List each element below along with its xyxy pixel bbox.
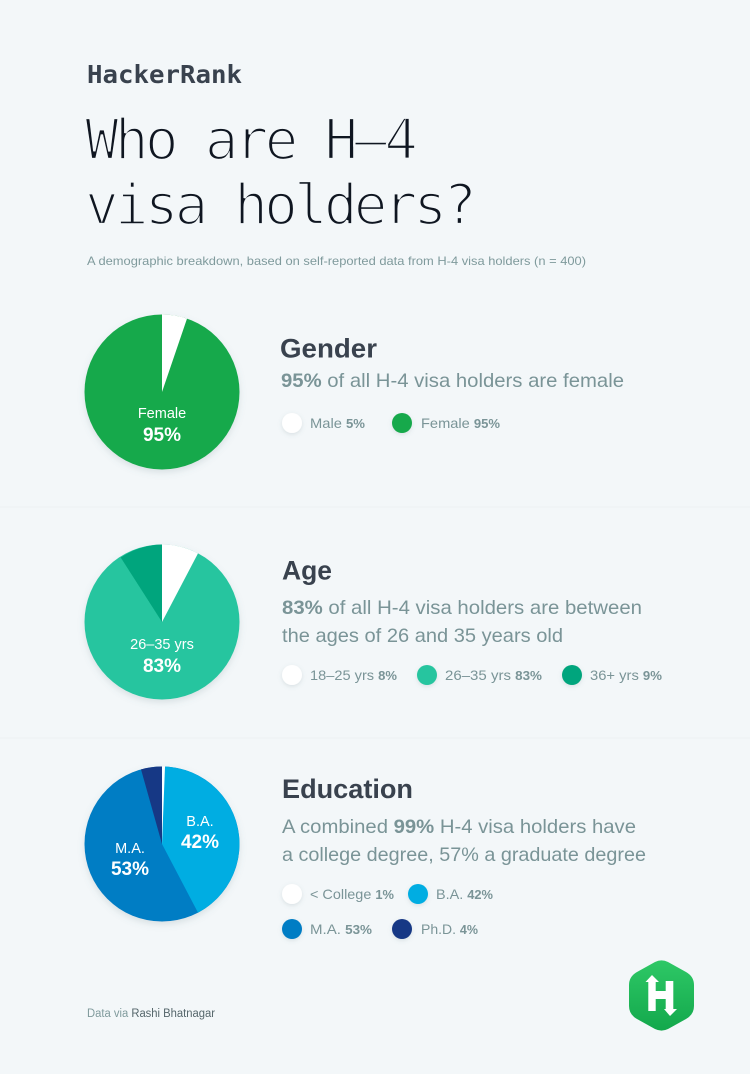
legend: gender: Female 95% [421,415,500,431]
legend: education [282,884,493,939]
pie chart: age: 26–35 yrs [130,637,194,653]
source credit: Data via Rashi Bhatnagar [87,1008,215,1020]
text: age finding: 83% of all H-4 visa holders are between [282,597,642,619]
legend: age [282,665,662,685]
pie chart: gender: Female [138,406,186,422]
text: age finding: the ages of 26 and 35 years old [282,625,563,647]
pie chart: education: 42% [181,832,219,853]
legend: age: 18–25 yrs 8% [310,667,397,683]
brand wordmark: HackerRank: HackerRank [87,60,242,89]
pie chart: education: 53% [111,859,149,880]
legend: age: 26–35 yrs 83% [445,667,542,683]
text: gender finding: 95% of all H-4 visa holders are female [281,370,624,392]
text: education finding: a college degree, 57% a graduate degree [282,844,646,866]
pie chart: education [84,766,240,922]
pie chart: age [84,544,240,700]
title [85,108,477,238]
pie chart: age: 83% [143,656,181,677]
legend: gender [282,413,500,433]
subtitle: A demographic breakdown, based on self-reported data from H-4 visa holders (n = 400) [87,254,586,268]
legend: age: 36+ yrs 9% [590,667,662,683]
panel: education [84,766,646,939]
text: age finding [282,597,642,647]
heading: education: Education [282,774,413,804]
icon: HackerRank logo [629,960,694,1031]
panel: gender [84,314,624,470]
legend: education: M.A. 53% [310,921,372,937]
title: visa holders? [85,173,477,238]
legend: gender: Male 5% [310,415,365,431]
heading: gender: Gender [280,334,378,364]
pie chart: education: M.A. [115,841,145,857]
text: education finding [282,816,646,866]
legend: education: Ph.D. 4% [421,921,478,937]
heading: age: Age [282,556,332,586]
legend: education: < College 1% [310,886,394,902]
pie chart: gender: 95% [143,425,181,446]
pie chart: gender [84,314,240,470]
pie chart: education: B.A. [186,814,214,830]
panel: age [84,544,662,700]
legend: education: B.A. 42% [436,886,493,902]
title: Who are H–4 [85,108,418,173]
text: education finding: A combined 99% H-4 visa holders have [282,816,636,838]
